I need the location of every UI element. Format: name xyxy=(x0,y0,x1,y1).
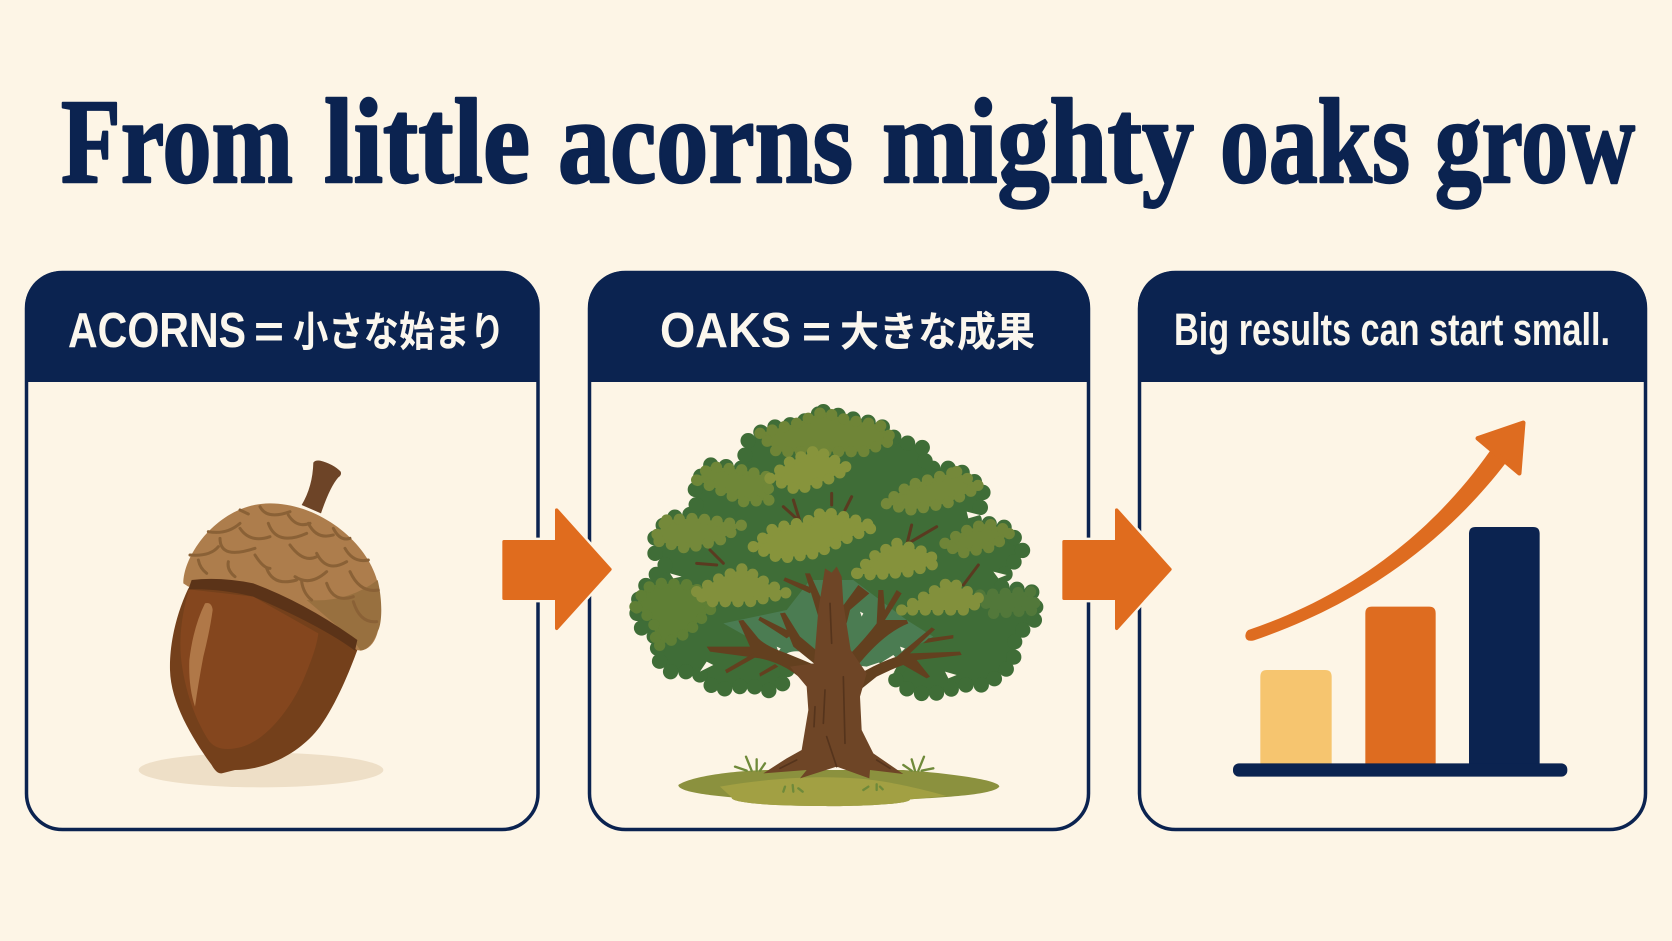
panel: result xyxy=(1138,271,1647,830)
heading: oaks: OAKS xyxy=(660,304,791,358)
bar: small xyxy=(1260,670,1332,765)
bar: tall xyxy=(1469,527,1540,765)
arrow: growth trend xyxy=(1245,423,1523,641)
icon: oak tree xyxy=(635,412,1038,806)
acorn stem xyxy=(302,461,341,513)
title: acorns xyxy=(558,75,853,209)
acorn cap scales xyxy=(190,507,378,622)
heading: acorns: 小さな始まり xyxy=(293,309,505,355)
panel frame: acorns xyxy=(26,272,538,830)
tree trunk xyxy=(763,567,903,778)
tree canopy back xyxy=(635,412,1038,695)
bar: medium xyxy=(1365,607,1436,765)
title: oaks xyxy=(1220,75,1410,209)
acorn nut xyxy=(170,587,357,773)
chart baseline xyxy=(1233,763,1567,777)
title: From xyxy=(61,75,293,209)
tree small branches xyxy=(697,493,978,585)
tree foliage clusters xyxy=(635,412,1037,647)
panel header: acorns xyxy=(25,271,540,382)
chart: growing bars xyxy=(1233,423,1567,777)
panel header: oaks xyxy=(588,271,1090,382)
heading: oaks: = xyxy=(802,305,831,357)
heading: oaks: 大きな成果 xyxy=(840,309,1035,355)
heading: acorns: ACORNS xyxy=(68,304,246,358)
tree trunk and branches xyxy=(707,573,962,690)
panel: oaks xyxy=(588,271,1090,830)
title xyxy=(61,75,1635,209)
acorn cap xyxy=(183,503,381,651)
heading: acorns: = xyxy=(254,305,284,357)
icon: acorn xyxy=(139,461,383,787)
heading: oaks xyxy=(660,304,1035,358)
arrow: oaks to result xyxy=(1064,510,1170,628)
tree ground xyxy=(678,757,999,806)
title: little xyxy=(324,75,530,209)
arrow: acorns to oaks xyxy=(504,510,610,628)
panel header: result xyxy=(1138,271,1647,382)
panel frame: oaks xyxy=(590,272,1088,830)
panel: acorns xyxy=(25,271,540,830)
panel frame: result xyxy=(1140,272,1646,830)
title: mighty xyxy=(882,75,1194,209)
heading: acorns xyxy=(68,304,505,358)
acorn shadow xyxy=(139,753,383,787)
